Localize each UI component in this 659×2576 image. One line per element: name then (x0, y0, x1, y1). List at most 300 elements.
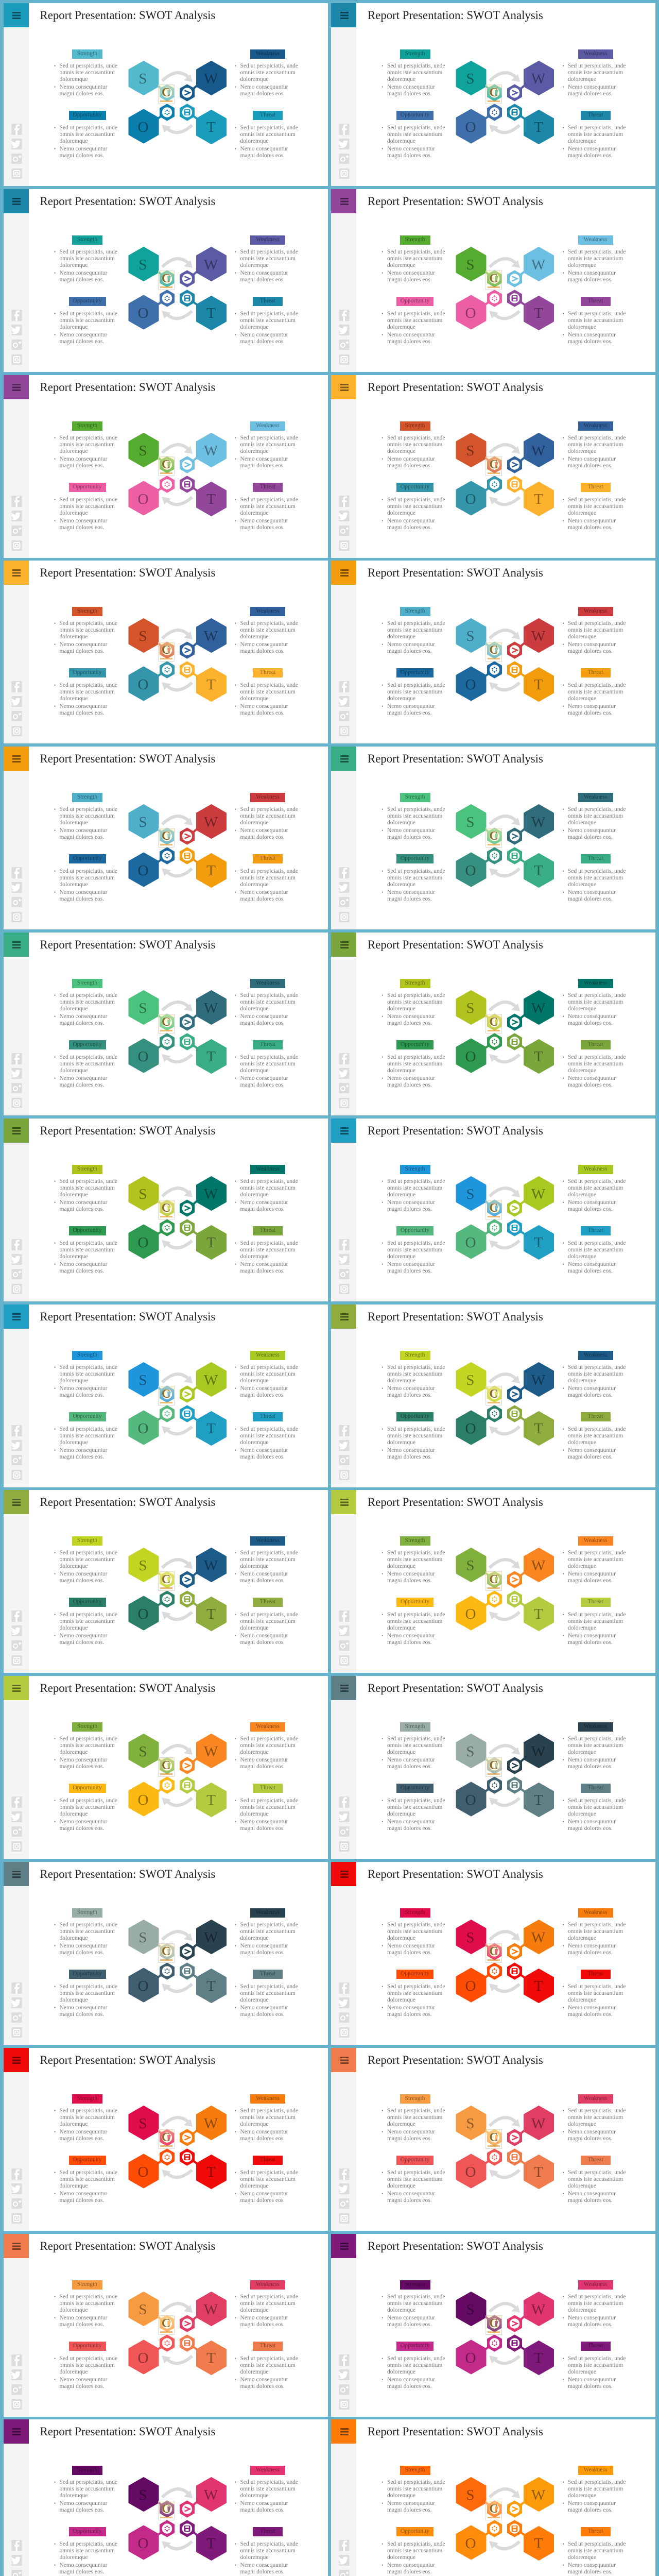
threat: doloremque (568, 1810, 596, 1817)
threat: Sed ut perspiciatis, unde (240, 1240, 298, 1246)
title: Report Presentation: SWOT Analysis (40, 381, 215, 394)
threat: Nemo consequuntur (568, 2562, 616, 2568)
opportunity: Nemo consequuntur (387, 1447, 435, 1453)
opportunity: Nemo consequuntur (60, 889, 107, 895)
strength: omnis iste accusantium (387, 1556, 442, 1562)
header tab (3, 2419, 29, 2444)
strength: omnis iste accusantium (387, 626, 442, 633)
opportunity: Sed ut perspiciatis, unde (60, 497, 117, 503)
opportunity: Opportunity (73, 1227, 102, 1233)
opportunity: magni dolores eos. (60, 2569, 104, 2575)
opportunity: magni dolores eos. (387, 2569, 432, 2575)
threat: magni dolores eos. (568, 2197, 613, 2203)
threat: magni dolores eos. (240, 1454, 285, 1460)
weakness: doloremque (568, 1935, 596, 1941)
SWOT hexagon diagram: T (534, 2535, 543, 2552)
threat: omnis iste accusantium (568, 1247, 623, 1253)
strength: Nemo consequuntur (60, 1385, 107, 1391)
strength: omnis iste accusantium (387, 1185, 442, 1191)
weakness: omnis iste accusantium (240, 441, 296, 447)
weakness: Nemo consequuntur (568, 1942, 616, 1948)
opportunity: omnis iste accusantium (60, 2547, 115, 2553)
strength: magni dolores eos. (60, 2135, 104, 2141)
threat: Sed ut perspiciatis, unde (568, 1984, 626, 1990)
threat: Threat (587, 112, 603, 118)
SWOT hexagon diagram: W (531, 2487, 546, 2503)
social sidebar (3, 585, 29, 743)
SWOT hexagon diagram: T (534, 119, 543, 135)
opportunity: Nemo consequuntur (387, 2562, 435, 2568)
strength: magni dolores eos. (387, 1020, 432, 1026)
SWOT hexagon diagram: O (465, 2350, 476, 2366)
weakness: magni dolores eos. (240, 1578, 285, 1584)
weakness: magni dolores eos. (240, 2321, 285, 2328)
title: Report Presentation: SWOT Analysis (368, 1496, 543, 1509)
weakness: Weakness (584, 1909, 607, 1916)
threat: Threat (587, 1227, 603, 1233)
opportunity: magni dolores eos. (387, 1267, 432, 1274)
threat: Sed ut perspiciatis, unde (240, 497, 298, 503)
weakness (562, 1165, 634, 1216)
weakness: magni dolores eos. (568, 2321, 613, 2328)
opportunity (382, 1598, 454, 1649)
threat: magni dolores eos. (568, 1825, 613, 1831)
weakness: Weakness (584, 794, 607, 800)
strength: Sed ut perspiciatis, unde (387, 806, 445, 812)
weakness: doloremque (568, 448, 596, 454)
opportunity: Nemo consequuntur (60, 145, 107, 151)
weakness: Nemo consequuntur (240, 1013, 288, 1019)
weakness: magni dolores eos. (568, 1950, 613, 1956)
strength: Strength (77, 2281, 97, 2287)
title: Report Presentation: SWOT Analysis (40, 1310, 215, 1323)
strength: Sed ut perspiciatis, unde (60, 63, 117, 69)
threat: omnis iste accusantium (240, 688, 296, 694)
strength: Strength (77, 1166, 97, 1172)
header tab (3, 1676, 29, 1700)
threat: Threat (260, 669, 275, 675)
opportunity: doloremque (60, 1253, 88, 1259)
weakness: Nemo consequuntur (568, 1757, 616, 1763)
weakness: Weakness (256, 2095, 280, 2102)
SWOT hexagon diagram: O (465, 2535, 476, 2552)
SWOT hexagon diagram: S (138, 1372, 147, 1388)
threat: Nemo consequuntur (568, 1819, 616, 1825)
SWOT hexagon diagram: O (137, 1978, 148, 1994)
weakness: Nemo consequuntur (240, 827, 288, 834)
opportunity: magni dolores eos. (60, 1267, 104, 1274)
weakness: doloremque (568, 634, 596, 640)
threat: Threat (587, 1413, 603, 1419)
title: Report Presentation: SWOT Analysis (368, 2425, 543, 2438)
strength: Sed ut perspiciatis, unde (387, 248, 445, 255)
opportunity: Nemo consequuntur (387, 2376, 435, 2382)
opportunity: Nemo consequuntur (60, 2562, 107, 2568)
threat: Sed ut perspiciatis, unde (568, 2169, 626, 2175)
title: Report Presentation: SWOT Analysis (368, 9, 543, 22)
opportunity (55, 668, 117, 716)
social sidebar (3, 1329, 29, 1487)
strength: magni dolores eos. (387, 1950, 432, 1956)
weakness (562, 2280, 634, 2332)
watermark tile: C (489, 2502, 498, 2516)
strength: magni dolores eos. (387, 2135, 432, 2141)
threat: Sed ut perspiciatis, unde (240, 2541, 298, 2547)
opportunity: Opportunity (73, 1785, 102, 1791)
weakness (562, 1351, 634, 1402)
threat: magni dolores eos. (240, 1639, 285, 1646)
opportunity: doloremque (387, 510, 415, 516)
opportunity: omnis iste accusantium (387, 688, 442, 694)
opportunity: Sed ut perspiciatis, unde (60, 2355, 117, 2362)
opportunity (382, 1784, 454, 1835)
opportunity: omnis iste accusantium (60, 2176, 115, 2182)
weakness: Sed ut perspiciatis, unde (240, 1550, 298, 1556)
threat: omnis iste accusantium (240, 2362, 296, 2368)
threat (235, 854, 307, 906)
strength: Nemo consequuntur (60, 2314, 107, 2320)
strength: doloremque (60, 634, 88, 640)
weakness: omnis iste accusantium (568, 69, 623, 75)
threat: magni dolores eos. (240, 152, 285, 159)
watermark tile: C (489, 272, 498, 285)
threat: doloremque (568, 2369, 596, 2375)
strength: doloremque (60, 1006, 88, 1012)
threat: Threat (587, 2157, 603, 2163)
opportunity: doloremque (60, 138, 88, 144)
strength: Nemo consequuntur (387, 1757, 435, 1763)
SWOT hexagon diagram: S (138, 1743, 147, 1760)
weakness: doloremque (568, 1749, 596, 1755)
watermark tile (485, 642, 502, 662)
opportunity: Nemo consequuntur (60, 2004, 107, 2010)
threat: Threat (587, 1599, 603, 1605)
weakness: omnis iste accusantium (568, 1556, 623, 1562)
weakness: Sed ut perspiciatis, unde (240, 435, 298, 441)
opportunity: Nemo consequuntur (387, 703, 435, 709)
strength: Sed ut perspiciatis, unde (387, 620, 445, 626)
weakness: Weakness (256, 1909, 280, 1916)
weakness: omnis iste accusantium (240, 1742, 296, 1749)
strength: Sed ut perspiciatis, unde (387, 992, 445, 998)
opportunity (382, 1040, 454, 1092)
weakness: Sed ut perspiciatis, unde (568, 435, 626, 441)
strength: magni dolores eos. (387, 91, 432, 97)
threat: Nemo consequuntur (568, 1447, 616, 1453)
SWOT hexagon diagram (3, 933, 327, 1115)
SWOT hexagon diagram: S (466, 2115, 475, 2132)
opportunity: omnis iste accusantium (60, 1247, 115, 1253)
threat: Sed ut perspiciatis, unde (568, 1797, 626, 1803)
threat: Threat (260, 2528, 275, 2534)
weakness: magni dolores eos. (240, 276, 285, 282)
threat (563, 297, 626, 344)
watermark tile (158, 1757, 174, 1777)
watermark tile (158, 2129, 174, 2149)
panel: slide 22 (331, 1862, 655, 2045)
strength: magni dolores eos. (387, 463, 432, 469)
opportunity: omnis iste accusantium (60, 131, 115, 137)
threat: Threat (260, 298, 275, 304)
threat (235, 1412, 307, 1464)
SWOT hexagon diagram: T (206, 491, 216, 507)
strength: doloremque (387, 819, 415, 825)
threat: magni dolores eos. (568, 152, 613, 159)
strength (382, 1165, 454, 1216)
threat: Threat (260, 855, 275, 861)
strength: magni dolores eos. (387, 2507, 432, 2513)
weakness: Sed ut perspiciatis, unde (240, 806, 298, 812)
opportunity: omnis iste accusantium (60, 1804, 115, 1810)
opportunity: omnis iste accusantium (387, 2362, 442, 2368)
SWOT hexagon diagram: T (206, 305, 216, 321)
weakness: doloremque (568, 2307, 596, 2313)
strength: omnis iste accusantium (60, 1185, 115, 1191)
threat: Sed ut perspiciatis, unde (240, 1797, 298, 1803)
threat: doloremque (568, 138, 596, 144)
SWOT hexagon diagram: T (534, 2350, 543, 2366)
weakness: Nemo consequuntur (568, 641, 616, 647)
weakness (235, 793, 307, 844)
weakness: doloremque (240, 1749, 268, 1755)
strength: Nemo consequuntur (60, 1942, 107, 1948)
opportunity: doloremque (387, 2554, 415, 2561)
panel: slide 3 (3, 189, 327, 372)
SWOT hexagon diagram (3, 1304, 327, 1487)
SWOT hexagon diagram: S (466, 814, 475, 831)
social sidebar (3, 2258, 29, 2417)
weakness: Nemo consequuntur (240, 2500, 288, 2506)
SWOT hexagon diagram: W (531, 257, 546, 273)
opportunity: omnis iste accusantium (387, 1804, 442, 1810)
opportunity: Opportunity (73, 1413, 102, 1419)
watermark tile (158, 2315, 174, 2335)
weakness: Nemo consequuntur (568, 83, 616, 90)
weakness: doloremque (568, 1563, 596, 1569)
opportunity: Nemo consequuntur (60, 1632, 107, 1638)
opportunity: doloremque (387, 138, 415, 144)
opportunity: Sed ut perspiciatis, unde (60, 310, 117, 316)
strength: omnis iste accusantium (60, 813, 115, 819)
opportunity (54, 1226, 126, 1278)
threat: magni dolores eos. (240, 1082, 285, 1088)
strength (54, 1351, 126, 1402)
threat: Nemo consequuntur (240, 2562, 288, 2568)
strength: omnis iste accusantium (60, 441, 115, 447)
title: Report Presentation: SWOT Analysis (40, 1496, 215, 1509)
strength (54, 2466, 126, 2517)
strength: Sed ut perspiciatis, unde (387, 1550, 445, 1556)
weakness: doloremque (240, 1191, 268, 1197)
watermark tile: C (162, 1573, 170, 1586)
title: Report Presentation: SWOT Analysis (40, 195, 215, 208)
strength (54, 2280, 126, 2332)
opportunity: Sed ut perspiciatis, unde (387, 2541, 445, 2547)
opportunity: Sed ut perspiciatis, unde (387, 1426, 445, 1432)
threat: Threat (587, 2528, 603, 2534)
threat: doloremque (568, 324, 596, 330)
strength: doloremque (387, 1563, 415, 1569)
threat: Threat (587, 298, 603, 304)
opportunity: Opportunity (401, 2343, 429, 2349)
strength: Sed ut perspiciatis, unde (60, 620, 117, 626)
opportunity: omnis iste accusantium (60, 1618, 115, 1624)
threat: magni dolores eos. (568, 338, 613, 344)
SWOT hexagon diagram (3, 1862, 327, 2045)
SWOT hexagon diagram: S (466, 2301, 475, 2318)
SWOT hexagon diagram: T (206, 676, 216, 693)
title: Report Presentation: SWOT Analysis (40, 2240, 215, 2252)
threat: Nemo consequuntur (568, 2004, 616, 2010)
threat: Nemo consequuntur (568, 2191, 616, 2197)
threat: Sed ut perspiciatis, unde (568, 1240, 626, 1246)
SWOT hexagon diagram: W (531, 1743, 546, 1760)
SWOT hexagon diagram (456, 247, 554, 330)
SWOT hexagon diagram: O (465, 862, 476, 879)
watermark tile (485, 1386, 502, 1405)
SWOT hexagon diagram: T (206, 2350, 216, 2366)
threat: Threat (260, 484, 275, 490)
strength: Sed ut perspiciatis, unde (387, 1178, 445, 1184)
strength: Sed ut perspiciatis, unde (387, 435, 445, 441)
threat: Nemo consequuntur (240, 1819, 288, 1825)
strength (55, 421, 117, 469)
SWOT hexagon diagram (129, 61, 227, 144)
weakness: Weakness (584, 2281, 607, 2287)
social sidebar (3, 399, 29, 558)
threat (562, 1970, 634, 2021)
watermark tile (158, 1571, 174, 1591)
weakness (562, 1536, 634, 1588)
opportunity: Nemo consequuntur (387, 2191, 435, 2197)
weakness: Weakness (584, 1723, 607, 1730)
threat: magni dolores eos. (568, 1454, 613, 1460)
threat: magni dolores eos. (240, 1267, 285, 1274)
threat: Nemo consequuntur (568, 332, 616, 338)
strength (54, 793, 126, 844)
SWOT hexagon diagram: W (531, 1372, 546, 1388)
strength: Nemo consequuntur (387, 83, 435, 90)
weakness: Nemo consequuntur (240, 1385, 288, 1391)
opportunity: Sed ut perspiciatis, unde (387, 125, 445, 131)
SWOT hexagon diagram: S (466, 2487, 475, 2503)
SWOT hexagon diagram: W (531, 443, 546, 459)
strength: Sed ut perspiciatis, unde (60, 806, 117, 812)
threat: Threat (587, 669, 603, 675)
social sidebar (331, 585, 356, 743)
SWOT hexagon diagram (331, 2419, 655, 2576)
weakness: doloremque (240, 1563, 268, 1569)
SWOT hexagon diagram: O (137, 1606, 148, 1622)
opportunity: omnis iste accusantium (387, 1990, 442, 1996)
opportunity: magni dolores eos. (60, 1082, 104, 1088)
opportunity: magni dolores eos. (387, 1825, 432, 1831)
threat: magni dolores eos. (568, 524, 613, 531)
weakness: doloremque (568, 2493, 596, 2499)
opportunity: Sed ut perspiciatis, unde (387, 1984, 445, 1990)
opportunity: Opportunity (401, 112, 429, 118)
title: Report Presentation: SWOT Analysis (368, 1682, 543, 1694)
weakness: Weakness (256, 1166, 280, 1172)
watermark tile: C (162, 1945, 170, 1958)
strength: Strength (405, 794, 425, 800)
weakness: doloremque (240, 1378, 268, 1384)
opportunity: Opportunity (73, 112, 102, 118)
weakness: Weakness (584, 980, 607, 986)
strength: omnis iste accusantium (60, 998, 115, 1005)
header tab (331, 375, 356, 399)
watermark tile (158, 1200, 174, 1219)
strength: magni dolores eos. (387, 648, 432, 654)
weakness (235, 1351, 307, 1402)
SWOT hexagon diagram: O (465, 305, 476, 321)
weakness: omnis iste accusantium (240, 256, 296, 262)
threat: Sed ut perspiciatis, unde (568, 1612, 626, 1618)
SWOT hexagon diagram: S (138, 443, 147, 459)
title: Report Presentation: SWOT Analysis (40, 566, 215, 579)
strength (382, 1536, 454, 1588)
SWOT hexagon diagram: T (534, 862, 543, 879)
strength: Strength (77, 1537, 97, 1544)
strength: omnis iste accusantium (387, 813, 442, 819)
panel: slide 25 (3, 2234, 327, 2417)
opportunity: Opportunity (401, 669, 429, 675)
strength: Nemo consequuntur (60, 1199, 107, 1206)
weakness: Nemo consequuntur (240, 2314, 288, 2320)
SWOT hexagon diagram: O (465, 119, 476, 135)
social sidebar (3, 957, 29, 1115)
social sidebar (331, 27, 356, 186)
panel: slide 20 (331, 1676, 655, 1859)
opportunity: doloremque (60, 2182, 88, 2189)
SWOT hexagon diagram (331, 933, 655, 1115)
weakness: Nemo consequuntur (568, 1013, 616, 1019)
strength: Nemo consequuntur (60, 455, 107, 462)
weakness: Weakness (256, 1723, 280, 1730)
strength: doloremque (60, 262, 88, 268)
SWOT hexagon diagram: S (138, 2487, 147, 2503)
strength: omnis iste accusantium (387, 1370, 442, 1377)
strength: Sed ut perspiciatis, unde (387, 1922, 445, 1928)
SWOT hexagon diagram: O (137, 2164, 148, 2180)
strength (382, 2094, 454, 2146)
strength: doloremque (60, 1191, 88, 1197)
weakness: Nemo consequuntur (240, 1199, 288, 1206)
SWOT hexagon diagram (456, 433, 554, 516)
threat (235, 1040, 307, 1092)
social sidebar (3, 771, 29, 929)
strength: Strength (77, 422, 97, 429)
strength: magni dolores eos. (60, 648, 104, 654)
weakness (235, 1165, 307, 1216)
SWOT hexagon diagram: S (138, 2301, 147, 2318)
weakness: magni dolores eos. (240, 1020, 285, 1026)
threat (562, 2342, 634, 2393)
opportunity: Sed ut perspiciatis, unde (60, 125, 117, 131)
strength: Sed ut perspiciatis, unde (60, 1922, 117, 1928)
watermark tile (158, 84, 174, 104)
weakness (235, 2280, 307, 2332)
SWOT hexagon diagram: S (138, 2115, 147, 2132)
opportunity: Opportunity (73, 298, 102, 304)
strength: doloremque (387, 1378, 415, 1384)
strength: Nemo consequuntur (387, 270, 435, 276)
opportunity: magni dolores eos. (60, 2011, 104, 2018)
threat: omnis iste accusantium (240, 1804, 296, 1810)
weakness: omnis iste accusantium (240, 1185, 296, 1191)
SWOT hexagon diagram: T (206, 1234, 216, 1251)
strength (382, 979, 454, 1030)
